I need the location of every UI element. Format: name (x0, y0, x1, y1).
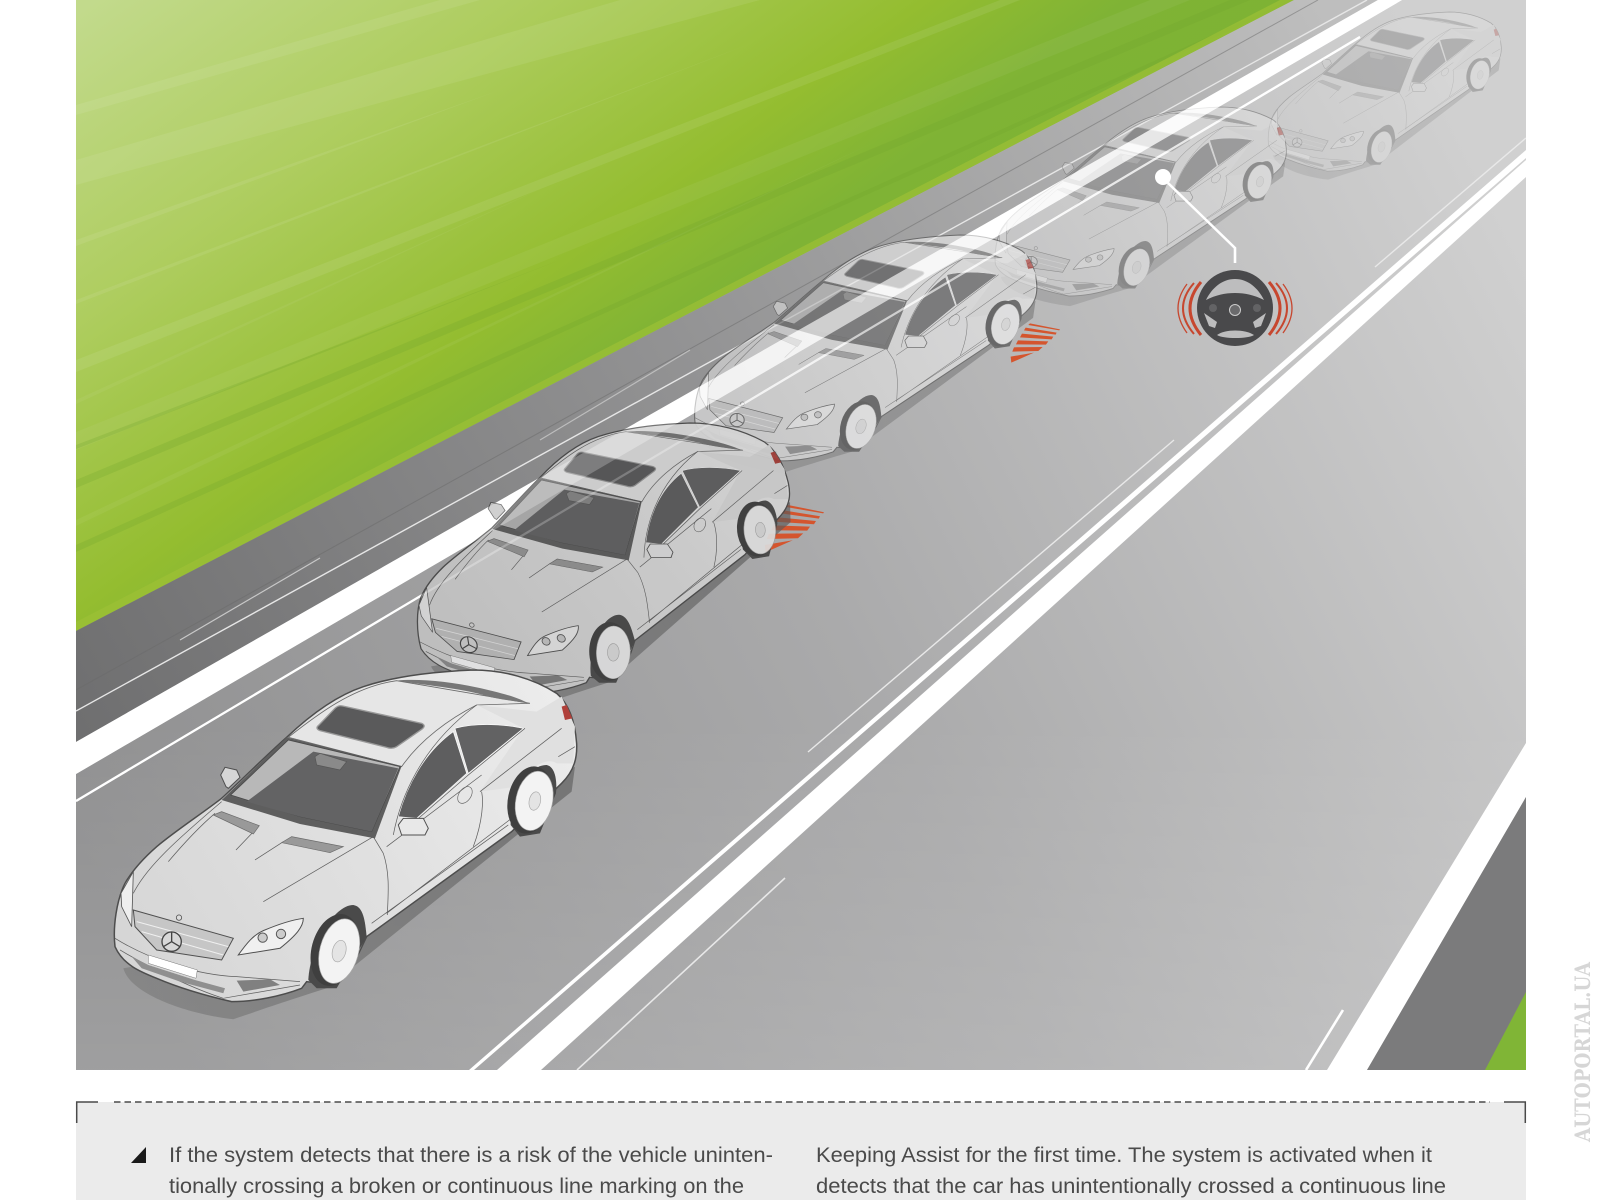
centre thin line (469, 150, 1526, 1070)
grass verge, upper left (76, 0, 1298, 631)
right dark verge (1367, 797, 1526, 1070)
car 5, farthest (1268, 12, 1501, 180)
lane band seen through car 4 (84, 107, 1242, 738)
text block: left column (169, 1143, 773, 1198)
callout leader line with dot (1155, 169, 1235, 263)
icon: vibrating steering wheel (1178, 270, 1292, 346)
right grass corner (1485, 992, 1526, 1070)
text panel background (76, 1102, 1526, 1200)
car 2 (416, 422, 790, 698)
right white band (1327, 743, 1526, 1070)
lane band seen through car 3 (76, 58, 1324, 801)
upper edge white band (76, 0, 1402, 774)
lane warning red stripes, car 2 (765, 505, 824, 552)
icon: section triangle marker (131, 1147, 146, 1163)
gray verge strip (76, 0, 1378, 742)
vibration arcs (1178, 282, 1292, 335)
panel dashed top border (77, 1102, 1525, 1123)
car 3, semi transparent (695, 235, 1037, 473)
thin line beneath upper band (76, 37, 1360, 801)
car 1, foreground (114, 670, 577, 1019)
lane warning red stripes, car 3 (1011, 323, 1060, 363)
text block: right column: Keeping Assist for the first time. The system is activated when it (816, 1143, 1432, 1167)
text block: right column: detects that the car has unintentionally crossed a continuous line (816, 1174, 1446, 1198)
road dash lines (577, 138, 1526, 1070)
car 4, faded (995, 107, 1286, 306)
text block: right column (816, 1143, 1446, 1198)
text block: left column: tionally crossing a broken or continuous line marking on the (169, 1174, 744, 1198)
watermark: AUTOPORTAL.UA (1570, 961, 1595, 1143)
text block: left column: If the system detects that there is a risk of the vehicle uninten- (169, 1143, 773, 1167)
lane band seen through car 2 (420, 235, 1012, 598)
centre thick white band (497, 160, 1526, 1070)
verge thin lines (76, 0, 1367, 711)
